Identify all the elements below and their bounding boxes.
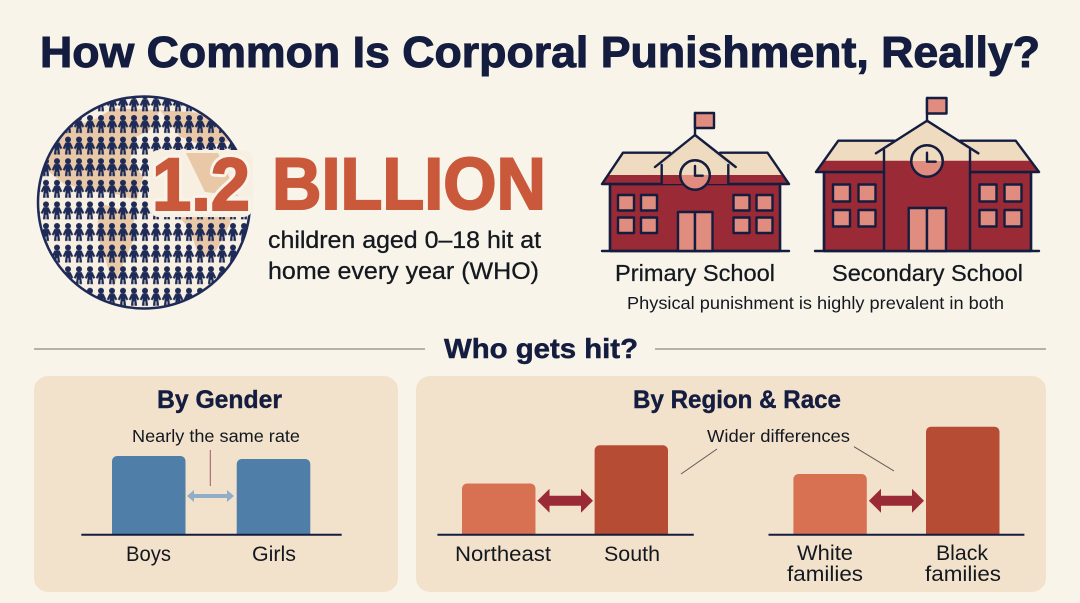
bar: girls xyxy=(237,459,310,535)
school caption: Physical punishment is highly prevalent in both xyxy=(627,293,1004,313)
bar: northeast xyxy=(462,484,536,535)
halo behind number xyxy=(149,150,253,217)
annotation: nearly the same rate: Nearly the same rate xyxy=(132,426,300,446)
arrow: small gap xyxy=(187,490,234,502)
title: How Common Is Corporal Punishment, Really? xyxy=(40,28,1040,77)
panel heading: by gender: By Gender xyxy=(157,386,282,414)
section heading: Who gets hit? xyxy=(444,333,638,364)
bar: boys xyxy=(112,456,186,535)
bar: black families xyxy=(926,427,1000,535)
label: northeast: Northeast xyxy=(455,543,551,566)
icon: secondary school xyxy=(815,98,1039,251)
label: white families: White xyxy=(797,542,853,565)
label: black families: families xyxy=(925,563,1001,586)
panel: by region and race xyxy=(416,376,1046,592)
stat description xyxy=(268,227,541,285)
label: south: South xyxy=(604,543,660,566)
bar: south xyxy=(595,445,668,535)
label: boys: Boys xyxy=(126,543,171,566)
panel heading: by region and race: By Region & Race xyxy=(633,386,841,414)
stat description: children aged 0–18 hit at xyxy=(268,227,541,254)
panel: by gender xyxy=(34,376,398,592)
school labels xyxy=(615,260,1023,286)
school labels: Secondary School xyxy=(832,260,1023,286)
label: black families: Black xyxy=(936,542,988,565)
label: white families xyxy=(787,542,863,586)
bar: white families xyxy=(793,474,867,535)
globe outline xyxy=(38,96,250,308)
headline word: billion: BILLION xyxy=(272,144,546,225)
label: black families xyxy=(925,542,1001,586)
arrow: white to black families xyxy=(869,489,924,513)
arrow: northeast to south xyxy=(537,489,593,513)
leader lines xyxy=(681,447,894,474)
label: white families: families xyxy=(787,563,863,586)
globe of children icon xyxy=(38,94,252,312)
icon: primary school xyxy=(602,113,789,251)
school labels: Primary School xyxy=(615,260,775,286)
headline number: 1.2: 1.2 xyxy=(152,143,250,226)
leader line xyxy=(209,450,211,486)
label: girls: Girls xyxy=(252,543,296,566)
annotation: wider differences: Wider differences xyxy=(707,426,850,446)
stat description: home every year (WHO) xyxy=(268,258,539,285)
headline number: 1.2: 1.2 xyxy=(152,143,250,226)
